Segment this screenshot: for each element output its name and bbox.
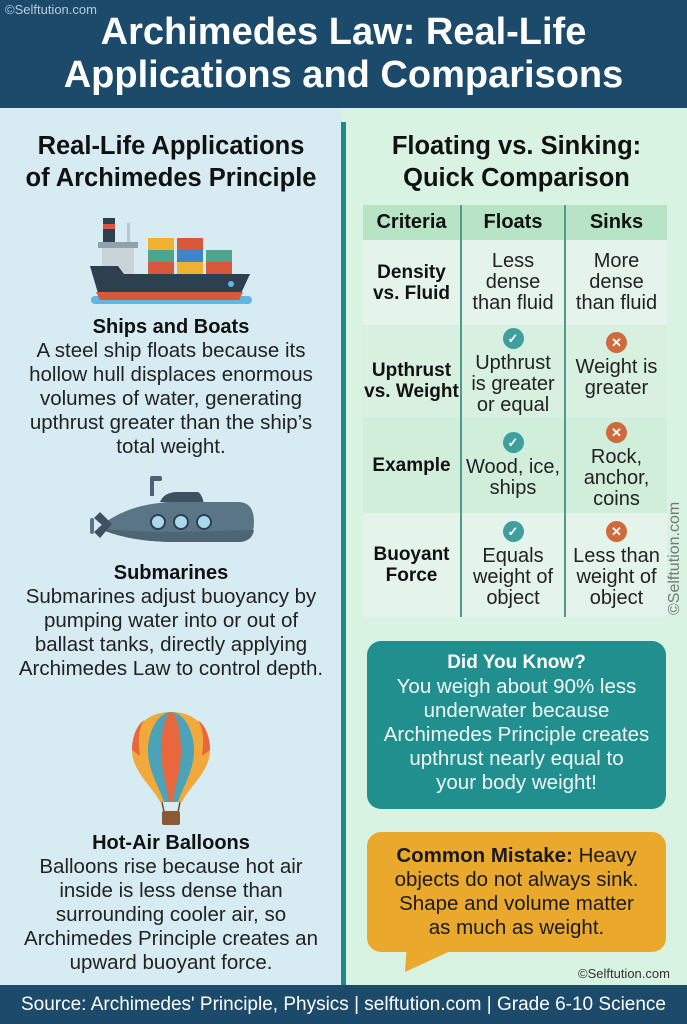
vertical watermark: ©Selftution.com [666,502,683,615]
callout: common mistake: Shape and volume matter [399,892,634,915]
callout: did you know: Did You Know? [447,652,586,673]
balloons text [24,832,318,974]
right heading: Quick Comparison [403,164,630,192]
comparison table: ✓ [508,435,518,450]
comparison table: dense [589,271,644,293]
comparison table: than fluid [576,292,657,314]
ships text [29,316,313,458]
comparison table: greater [585,377,648,399]
footer [0,985,687,1024]
callout: did you know [367,641,666,809]
title: Archimedes Law: Real-Life [101,11,586,53]
icon: cargo ship [90,218,252,304]
submarines text: Archimedes Law to control depth. [19,657,323,680]
watermark top: ©Selftution.com [5,2,97,17]
comparison table: dense [486,271,540,293]
ships text: hollow hull displaces enormous [29,363,313,386]
comparison table: Upthrust [475,352,551,374]
balloons text: Balloons rise because hot air [39,855,303,878]
comparison table: ✕ [611,335,622,350]
comparison table: Rock, [591,446,642,468]
icon: submarine [90,476,254,542]
comparison table: Upthrust [372,360,451,380]
comparison table: More [594,250,639,272]
comparison table: Less [492,250,534,272]
comparison table: weight of [576,566,657,588]
comparison table: Buoyant [374,544,450,565]
callout: common mistake: Common Mistake: Heavy [396,844,637,867]
right heading [392,132,641,192]
comparison table: vs. Weight [364,380,459,402]
left heading: of Archimedes Principle [26,164,316,192]
comparison table: ✕ [611,524,622,539]
comparison table: Density [377,262,446,282]
comparison table: ships [490,477,536,499]
comparison table: vs. Fluid [373,282,450,304]
callout: did you know: underwater because [424,699,609,722]
callout: common mistake: objects do not always sink. [395,868,638,891]
left heading [26,132,316,192]
balloons text: Archimedes Principle creates an [24,927,318,950]
ships text: volumes of water, generating [40,387,302,410]
comparison table: ✓ [508,524,518,539]
balloons text: surrounding cooler air, so [56,903,286,926]
balloons text: inside is less dense than [59,879,283,902]
submarines text [19,562,323,680]
comparison table: Floats [484,211,542,233]
callout: did you know: Archimedes Principle creates [384,723,649,746]
comparison table: ✕ [611,424,622,440]
comparison table: Weight is [576,356,657,378]
comparison table: ✓ [508,330,518,346]
submarines text: Submarines [114,562,228,584]
callout: common mistake [367,832,666,972]
divider [341,122,346,985]
comparison table: weight of [473,566,553,588]
balloons text: Hot-Air Balloons [92,832,250,854]
ships text: total weight. [116,435,226,458]
title [64,11,623,96]
comparison table [363,205,667,617]
submarines text: ballast tanks, directly applying [35,633,307,656]
ships text: upthrust greater than the ship’s [30,411,312,434]
comparison table: Force [386,565,437,586]
comparison table: coins [593,488,640,510]
left heading: Real-Life Applications [38,132,304,160]
balloons text: upward buoyant force. [70,951,272,974]
submarines text: Submarines adjust buoyancy by [26,585,316,608]
comparison table: than fluid [472,292,554,314]
right heading: Floating vs. Sinking: [392,132,641,160]
callout: common mistake: as much as weight. [429,916,604,939]
ships text: Ships and Boats [93,316,249,338]
comparison table: Less than [573,545,660,567]
comparison table: or equal [477,394,549,416]
comparison table: Sinks [590,211,643,233]
footer: Source: Archimedes' Principle, Physics | selftution.com | Grade 6-10 Science [21,994,666,1015]
ships text: A steel ship floats because its [37,339,305,362]
callout: did you know: You weigh about 90% less [397,675,636,698]
callout: did you know: your body weight! [436,771,597,794]
comparison table: Wood, ice, [466,456,560,478]
comparison table: is greater [471,372,555,394]
header [0,0,687,108]
title: Applications and Comparisons [64,54,623,96]
callout: did you know: upthrust nearly equal to [409,747,624,770]
comparison table: object [486,587,540,609]
comparison table: Example [372,455,451,476]
comparison table: anchor, [584,466,649,488]
watermark bottom: ©Selftution.com [578,966,670,981]
comparison table: object [590,587,643,609]
comparison table: Criteria [376,211,447,233]
left panel [0,108,342,985]
submarines text: pumping water into or out of [44,609,298,632]
icon: hot-air balloon [132,712,210,825]
comparison table: Equals [482,545,544,567]
